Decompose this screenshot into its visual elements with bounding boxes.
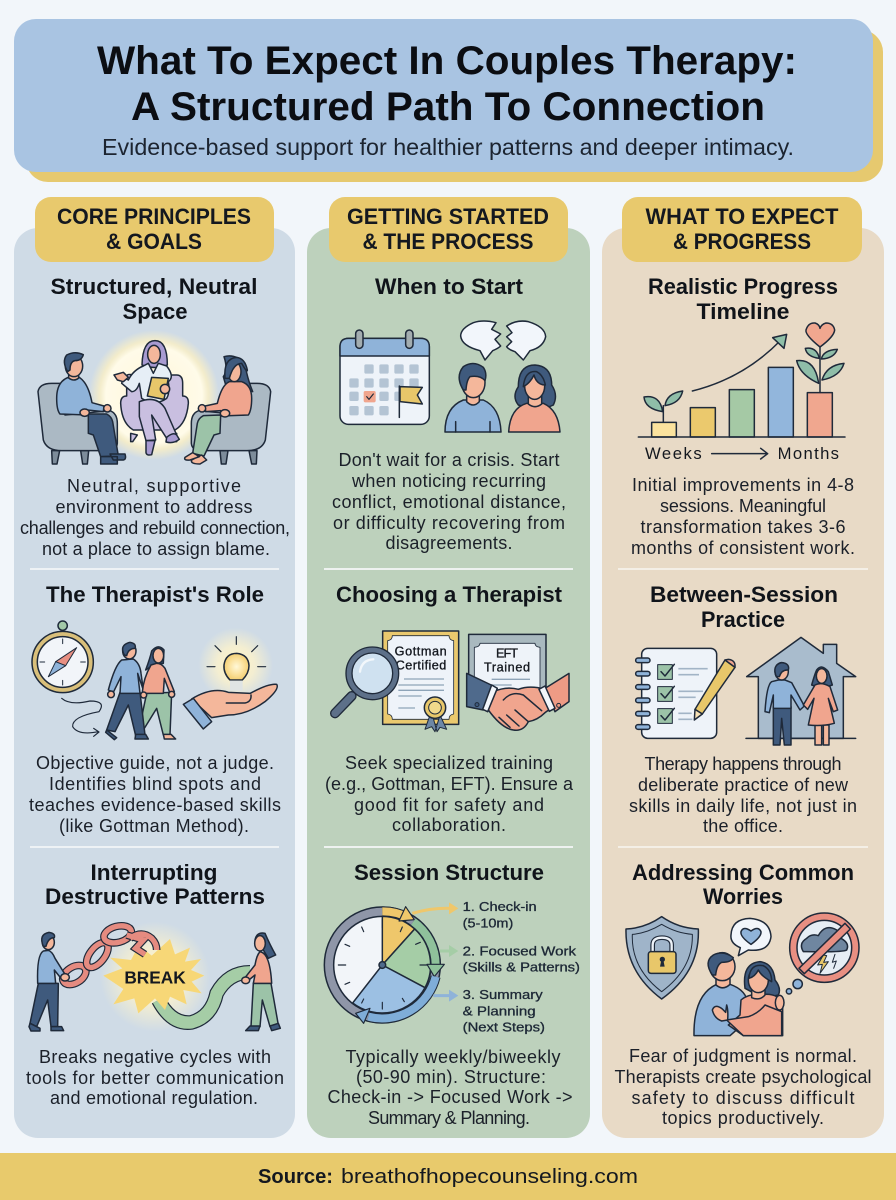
text: the therapist's role: Objective guide, not a judge.	[36, 753, 274, 773]
icon: Gottman certificate: Gottman	[395, 645, 447, 659]
text: addressing common worries: safety to discuss difficult	[632, 1088, 854, 1108]
text: when to start	[332, 450, 566, 553]
icon: EFT certificate: Trained	[484, 661, 530, 675]
stage labels: (Skills & Patterns)	[463, 961, 580, 975]
text: interrupting destructive patterns: Breaks negative cycles with	[39, 1047, 271, 1067]
red chain	[59, 923, 157, 988]
heading: realistic progress timeline	[648, 274, 838, 324]
illustration: checklist and couple at home	[636, 637, 856, 745]
text: when to start: Don't wait for a crisis. Start	[338, 450, 560, 470]
text: structured neutral space: challenges and rebuild connection,	[20, 518, 290, 538]
thought dots	[786, 979, 802, 994]
chart: session clock with stages	[324, 900, 580, 1035]
column header: getting started: GETTING STARTED	[347, 204, 549, 229]
heading: realistic progress timeline: Timeline	[696, 299, 790, 324]
icon: Gottman certificate	[383, 631, 459, 732]
text: the therapist's role: (like Gottman Method).	[59, 816, 249, 836]
heading: interrupting destructive patterns: Interrupting	[90, 860, 218, 885]
heading: the therapist's role: The Therapist's Role	[46, 582, 264, 607]
right armchair	[191, 383, 271, 464]
column header: getting started	[329, 197, 568, 262]
text: realistic progress timeline: months of consistent work.	[631, 538, 855, 558]
axis labels	[645, 444, 839, 463]
text: interrupting destructive patterns	[26, 1047, 284, 1108]
heading: structured neutral space	[50, 274, 258, 324]
title: A Structured Path To Connection	[131, 85, 765, 129]
column header: core principles: & GOALS	[106, 229, 202, 254]
illustration: calendar and couple with broken speech bubbles	[340, 321, 560, 432]
icon: EFT certificate	[469, 634, 546, 706]
stage labels	[463, 900, 580, 1035]
text: session structure: Summary & Planning.	[368, 1108, 530, 1128]
stage labels: 1. Check-in	[463, 900, 537, 914]
text: between-session practice: Therapy happens through	[644, 754, 842, 774]
text: between-session practice	[629, 754, 857, 836]
heading: structured neutral space: Space	[122, 299, 188, 324]
icon: handshake	[467, 673, 569, 730]
green band	[158, 972, 250, 1023]
text: when to start: disagreements.	[386, 533, 512, 553]
arrow: upward trend	[692, 334, 787, 391]
man	[445, 363, 501, 432]
text: choosing a therapist: collaboration.	[392, 815, 506, 835]
stage labels: & Planning	[463, 1005, 536, 1019]
text: when to start: conflict, emotional distance,	[332, 492, 566, 512]
starburst: break	[103, 939, 204, 1013]
icon: light bulb on open hand	[183, 628, 277, 729]
left armchair	[38, 383, 117, 464]
text: between-session practice: deliberate practice of new	[638, 775, 849, 795]
column header: what to expect: & PROGRESS	[673, 229, 811, 254]
text: realistic progress timeline: sessions. Meaningful	[660, 496, 826, 516]
hugging couple	[694, 953, 784, 1036]
column header: core principles	[35, 197, 274, 262]
icon: magnifying glass	[335, 650, 396, 713]
heading: between-session practice	[650, 582, 838, 632]
column header: what to expect	[622, 197, 862, 262]
text: session structure: Typically weekly/biweekly	[346, 1047, 560, 1067]
subtitle: Evidence-based support for healthier patterns and deeper intimacy.	[102, 134, 794, 160]
panel: getting started and the process	[307, 197, 590, 1138]
source footer: breathofhopecounseling.com	[341, 1166, 638, 1188]
text: between-session practice: the office.	[703, 816, 783, 836]
man and woman holding hands	[765, 663, 838, 745]
text: choosing a therapist	[325, 753, 574, 835]
heading: between-session practice: Practice	[701, 607, 785, 632]
clock wedges	[353, 916, 431, 1013]
heading: addressing common worries: Worries	[703, 884, 783, 909]
text: structured neutral space: Neutral, supportive	[67, 476, 241, 496]
axis labels: Weeks	[645, 444, 702, 463]
illustration: therapist with couple	[38, 330, 271, 464]
icon: heart plant	[797, 323, 844, 392]
text: when to start: when noticing recurring	[351, 471, 546, 491]
illustration: shield, hugging couple, no storm	[626, 913, 859, 1036]
icon: notebook checklist	[636, 648, 735, 738]
arrow: winding path	[62, 698, 101, 736]
text: the therapist's role	[29, 753, 281, 836]
text: session structure: Check-in -> Focused Work ->	[328, 1087, 572, 1107]
icon: EFT certificate: EFT	[496, 646, 518, 660]
text: structured neutral space: environment to address	[56, 497, 252, 517]
icon: Gottman certificate: Certified	[396, 658, 446, 672]
text: addressing common worries	[614, 1046, 872, 1128]
heading: addressing common worries	[632, 860, 854, 909]
text: realistic progress timeline	[631, 475, 855, 558]
person holding green band	[242, 933, 280, 1031]
text: choosing a therapist: (e.g., Gottman, EFT). Ensure a	[325, 774, 574, 794]
stage labels: (Next Steps)	[463, 1021, 545, 1035]
heading: interrupting destructive patterns	[45, 860, 265, 909]
axis labels: Months	[778, 444, 839, 463]
stage arrows	[412, 902, 458, 1002]
heading: choosing a therapist: Choosing a Therapist	[336, 582, 563, 607]
icon: speech bubble with heart	[731, 918, 771, 956]
starburst: break: BREAK	[124, 967, 186, 987]
text: the therapist's role: Identifies blind spots and	[49, 774, 261, 794]
illustration: breaking the chain	[29, 922, 280, 1032]
heading: structured neutral space: Structured, Neutral	[50, 274, 258, 299]
text: interrupting destructive patterns: tools for better communication	[26, 1068, 284, 1088]
heading: addressing common worries: Addressing Common	[632, 860, 854, 885]
text: addressing common worries: Fear of judgment is normal.	[629, 1046, 857, 1066]
icon: sprout	[644, 391, 683, 422]
icon: crossed-out storm cloud	[790, 913, 859, 982]
heading: session structure: Session Structure	[354, 860, 544, 885]
column header: core principles: CORE PRINCIPLES	[57, 204, 251, 229]
text: when to start: or difficulty recovering from	[333, 513, 565, 533]
walking couple	[106, 642, 176, 740]
text: interrupting destructive patterns: and emotional regulation.	[50, 1088, 258, 1108]
heading: interrupting destructive patterns: Destructive Patterns	[45, 884, 265, 909]
heading: realistic progress timeline: Realistic Progress	[648, 274, 838, 299]
stage labels: 3. Summary	[463, 988, 543, 1002]
text: choosing a therapist: good fit for safety and	[354, 795, 544, 815]
chart: growth bars from weeks to months	[638, 323, 845, 463]
icon: house	[746, 637, 856, 738]
source footer: Source:	[258, 1166, 333, 1188]
woman	[509, 365, 560, 432]
text: structured neutral space: not a place to assign blame.	[42, 539, 270, 559]
text: the therapist's role: teaches evidence-based skills	[29, 795, 281, 815]
ring arrows	[356, 907, 444, 1023]
text: between-session practice: skills in daily life, not just in	[629, 796, 857, 816]
text: addressing common worries: topics productively.	[662, 1108, 824, 1128]
illustration: certificates, magnifier, handshake	[335, 631, 569, 732]
therapist	[114, 341, 188, 455]
icon: shield with lock	[626, 917, 698, 999]
source footer	[0, 1153, 896, 1200]
title	[97, 39, 797, 129]
header banner	[14, 19, 883, 182]
text: session structure	[328, 1047, 572, 1128]
icon: compass	[32, 621, 93, 693]
bars	[652, 367, 832, 437]
text: session structure: (50-90 min). Structure:	[356, 1067, 546, 1087]
heading: when to start: When to Start	[375, 274, 524, 299]
stage labels: (5-10m)	[463, 917, 513, 931]
text: realistic progress timeline: transformation takes 3-6	[640, 517, 846, 537]
illustration: compass, walking couple, hand with bulb	[32, 621, 277, 740]
title: What To Expect In Couples Therapy:	[97, 39, 797, 83]
column header: getting started: & THE PROCESS	[362, 229, 534, 254]
icon: broken speech bubbles	[461, 321, 546, 360]
icon: calendar	[340, 330, 429, 424]
panel: core principles and goals	[14, 197, 295, 1138]
text: realistic progress timeline: Initial improvements in 4-8	[632, 475, 854, 495]
panel: what to expect and progress	[602, 197, 884, 1138]
heading: between-session practice: Between-Session	[650, 582, 838, 607]
column header: what to expect: WHAT TO EXPECT	[646, 204, 839, 229]
stage labels: 2. Focused Work	[463, 945, 577, 959]
text: structured neutral space	[20, 476, 290, 559]
person pulling chain	[29, 932, 69, 1031]
text: addressing common worries: Therapists create psychological	[614, 1067, 872, 1087]
text: choosing a therapist: Seek specialized training	[345, 753, 553, 773]
